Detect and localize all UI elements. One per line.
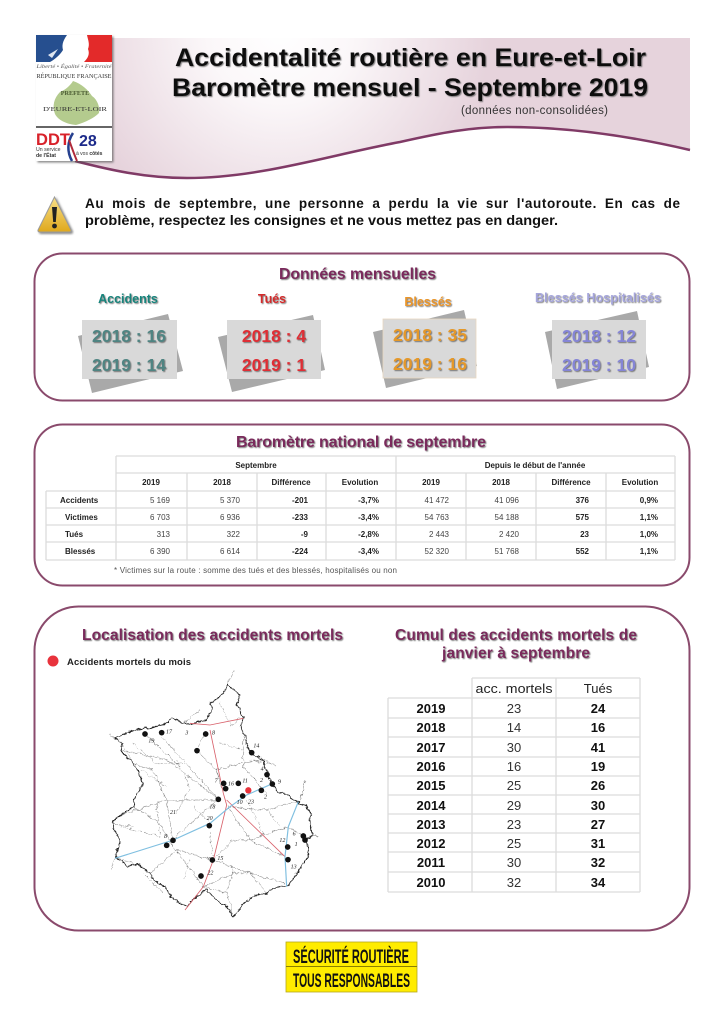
warning message: Au mois de septembre, une personne a perdu la vie sur l'autoroute. En cas de (85, 196, 680, 211)
table: cumul des accidents mortels: 31 (591, 836, 605, 851)
table: baromètre national: 2 420 (499, 530, 520, 539)
table: baromètre national: 322 (227, 530, 241, 539)
title (172, 44, 648, 102)
table: cumul des accidents mortels: 2014 (417, 798, 446, 813)
logo: préfecture and DDT 28 (35, 35, 113, 161)
heading: cumul (395, 627, 637, 662)
table: cumul des accidents mortels: 30 (507, 740, 521, 755)
heading: cumul: Cumul des accidents mortels de (395, 627, 637, 644)
table: cumul des accidents mortels: 26 (591, 778, 605, 793)
map fatal accident dots (142, 730, 308, 879)
table: baromètre national: 2019 (422, 478, 440, 487)
table: baromètre national: 6 936 (220, 513, 241, 522)
table: baromètre national: 23 (580, 530, 590, 539)
table: baromètre national: -3,4% (358, 547, 379, 556)
map accident numbers: 16 (228, 781, 234, 787)
card: tués: 2019 : 1 (242, 355, 306, 375)
logo: préfecture and DDT 28: Liberté • Égalité • Fraternité (35, 64, 113, 70)
table: baromètre national: 313 (157, 530, 171, 539)
table: baromètre national: 52 320 (425, 547, 450, 556)
map accident numbers: 20 (207, 816, 213, 822)
table: baromètre national: 1,1% (640, 547, 658, 556)
card: blessés: Blessés (404, 295, 452, 309)
table: cumul des accidents mortels: 2016 (417, 759, 445, 774)
panel: accidents mortels (34, 606, 690, 930)
logo: sécurité routière: TOUS RESPONSABLES (293, 971, 410, 992)
map accident numbers: 23 (248, 799, 254, 805)
heading: cumul: janvier à septembre (441, 645, 590, 662)
table: baromètre national: -233 (292, 513, 309, 522)
table: baromètre national: 2018 (213, 478, 231, 487)
table: cumul des accidents mortels: 2013 (417, 817, 445, 832)
card: blessés hospitalisés: 2019 : 10 (562, 355, 636, 375)
heading: baromètre national: Baromètre national de septembre (236, 434, 486, 451)
logo: préfecture and DDT 28: à vos côtés (76, 151, 103, 157)
panel: baromètre national (34, 424, 690, 586)
table: baromètre national: 51 768 (495, 547, 520, 556)
table: cumul des accidents mortels: 2019 (417, 701, 445, 716)
title: Accidentalité routière en Eure-et-Loir (175, 44, 646, 72)
card: tués: Tués (258, 292, 286, 306)
logo: sécurité routière (286, 942, 417, 992)
table: cumul des accidents mortels: 27 (591, 817, 605, 832)
map blue motorways (115, 783, 298, 887)
map accident numbers: 17 (166, 729, 173, 735)
card: blessés hospitalisés: Blessés Hospitalisés (535, 291, 661, 305)
map accident numbers: 10 (237, 800, 243, 806)
card: blessés: 2018 : 35 (393, 325, 467, 345)
table: baromètre national: Septembre (235, 461, 277, 470)
warning message: problème, respectez les consignes et ne vous mettez pas en danger. (85, 212, 558, 228)
map outer boundary (113, 685, 313, 917)
card: blessés: 2019 : 16 (393, 354, 467, 374)
logo: préfecture and DDT 28: RÉPUBLIQUE FRANÇAISE (36, 72, 112, 80)
map accident numbers: 12 (279, 838, 285, 844)
table: cumul des accidents mortels: 25 (507, 778, 521, 793)
logo: préfecture and DDT 28: D'EURE-ET-LOIR (43, 106, 108, 113)
table: baromètre national: 2 443 (429, 530, 450, 539)
map accident numbers: 2 (264, 795, 267, 801)
map accident numbers: 15 (217, 856, 223, 862)
table: baromètre national: 2018 (492, 478, 510, 487)
heading: localisation: Localisation des accidents mortels (82, 627, 343, 644)
table: baromètre national: Différence (271, 478, 311, 487)
table: cumul des accidents mortels: 2010 (417, 875, 445, 890)
footnote: * Victimes sur la route : somme des tués et des blessés, hospitalisés ou non (114, 566, 397, 575)
map accident numbers: 11 (242, 779, 248, 785)
table: cumul des accidents mortels: 16 (507, 759, 521, 774)
table: cumul des accidents mortels: 34 (591, 875, 606, 890)
map accident numbers: 9 (278, 779, 281, 785)
map accident numbers: 18 (209, 805, 215, 811)
map: Eure-et-Loir (110, 672, 318, 917)
table: cumul des accidents mortels: 2012 (417, 836, 445, 851)
table: cumul des accidents mortels: 23 (507, 701, 521, 716)
logo: préfecture and DDT 28: 28 (79, 133, 97, 150)
card: accidents: 2018 : 16 (92, 326, 166, 346)
table: cumul des accidents mortels: 2015 (417, 778, 445, 793)
map accident numbers: 3 (184, 731, 188, 737)
map accident numbers: 14 (253, 742, 259, 749)
card: accidents (78, 292, 183, 393)
map accident numbers: 19 (148, 739, 154, 745)
table: cumul des accidents mortels: 32 (591, 855, 605, 870)
legend: accidents mortels du mois: Accidents mortels du mois (67, 657, 191, 668)
map accident numbers: 21 (170, 810, 176, 816)
table: baromètre national: 552 (576, 547, 590, 556)
table: cumul des accidents mortels: 29 (507, 798, 521, 813)
table: baromètre national: 0,9% (640, 496, 658, 505)
card: blessés (373, 295, 477, 388)
card: accidents: 2019 : 14 (92, 355, 166, 375)
table: baromètre national: Evolution (622, 478, 658, 487)
table: baromètre national: 41 472 (425, 496, 450, 505)
map accident numbers: 8 (164, 834, 167, 840)
table: baromètre national: 5 169 (150, 496, 171, 505)
header banner (75, 38, 690, 178)
map accident numbers: 2 (260, 778, 263, 784)
table: baromètre national: Evolution (342, 478, 378, 487)
icon: warning triangle (38, 197, 71, 232)
table: baromètre national: Victimes (65, 513, 98, 522)
map accident numbers: 8 (212, 731, 215, 737)
map accident numbers: 7 (215, 779, 219, 785)
table: cumul des accidents mortels: 16 (591, 720, 605, 735)
panel: données mensuelles (34, 254, 690, 400)
table: baromètre national (46, 456, 675, 560)
table: cumul des accidents mortels: 25 (507, 836, 521, 851)
table: baromètre national: -201 (292, 496, 309, 505)
table: baromètre national: 575 (576, 513, 590, 522)
map accident numbers: 4 (261, 766, 264, 773)
table: cumul des accidents mortels: 2018 (417, 720, 445, 735)
table: baromètre national: 54 188 (495, 513, 520, 522)
table: cumul des accidents mortels: Tués (584, 681, 613, 696)
table: baromètre national: 6 390 (150, 547, 171, 556)
map red main roads (185, 718, 285, 910)
table: cumul des accidents mortels: acc. mortels (476, 681, 553, 696)
logo: préfecture and DDT 28: DDT (36, 130, 71, 149)
table: cumul des accidents mortels: 41 (591, 740, 605, 755)
card: accidents: Accidents (98, 292, 158, 306)
table: baromètre national: Accidents (60, 496, 99, 505)
table: baromètre national: 1,0% (640, 530, 658, 539)
table: cumul des accidents mortels: 32 (507, 875, 521, 890)
logo: préfecture and DDT 28: PREFETE (61, 90, 89, 97)
table: baromètre national: 54 763 (425, 513, 450, 522)
table: cumul des accidents mortels: 14 (507, 720, 521, 735)
table: baromètre national: 376 (576, 496, 590, 505)
table: baromètre national: 5 370 (220, 496, 241, 505)
map accident numbers: 1 (295, 842, 298, 848)
card: blessés hospitalisés (535, 291, 661, 389)
table: cumul des accidents mortels: 2011 (417, 855, 445, 870)
subtitle: (données non-consolidées) (461, 105, 608, 117)
table: baromètre national: -3,4% (358, 513, 379, 522)
table: baromètre national: Depuis le début de l'année (485, 461, 586, 470)
table: cumul des accidents mortels: 30 (507, 855, 521, 870)
table: cumul des accidents mortels: 23 (507, 817, 521, 832)
table: cumul des accidents mortels: 2017 (417, 740, 445, 755)
table: baromètre national: 6 703 (150, 513, 171, 522)
table: baromètre national: 1,1% (640, 513, 658, 522)
table: baromètre national: Différence (551, 478, 591, 487)
table: cumul des accidents mortels: 30 (591, 798, 605, 813)
table: baromètre national: Blessés (65, 547, 96, 556)
table: baromètre national: 2019 (142, 478, 160, 487)
logo: préfecture and DDT 28: Un service (36, 147, 61, 153)
title: Baromètre mensuel - Septembre 2019 (172, 74, 648, 102)
logo: sécurité routière: SÉCURITÉ ROUTIÈRE (293, 946, 409, 968)
logo: préfecture and DDT 28: de l'État (36, 151, 56, 159)
map roads (110, 672, 318, 917)
warning message (85, 196, 680, 228)
heading: données mensuelles: Données mensuelles (279, 266, 436, 283)
card: blessés hospitalisés: 2018 : 12 (562, 326, 636, 346)
table: baromètre national: 41 096 (495, 496, 520, 505)
table: baromètre national: -9 (301, 530, 309, 539)
map accident numbers: 22 (207, 871, 213, 877)
map accident numbers: 6 (293, 831, 296, 837)
table: baromètre national: -224 (292, 547, 309, 556)
table: cumul des accidents mortels: 19 (591, 759, 605, 774)
table: cumul des accidents mortels (388, 678, 640, 892)
map accident numbers (148, 729, 298, 877)
table: baromètre national: -2,8% (358, 530, 379, 539)
map accident numbers: 13 (291, 865, 297, 871)
table: baromètre national: 6 614 (220, 547, 241, 556)
card: tués (218, 292, 325, 392)
table: baromètre national: Tués (65, 530, 84, 539)
card: tués: 2018 : 4 (242, 326, 306, 346)
table: cumul des accidents mortels: 24 (591, 701, 606, 716)
table: baromètre national: -3,7% (358, 496, 379, 505)
